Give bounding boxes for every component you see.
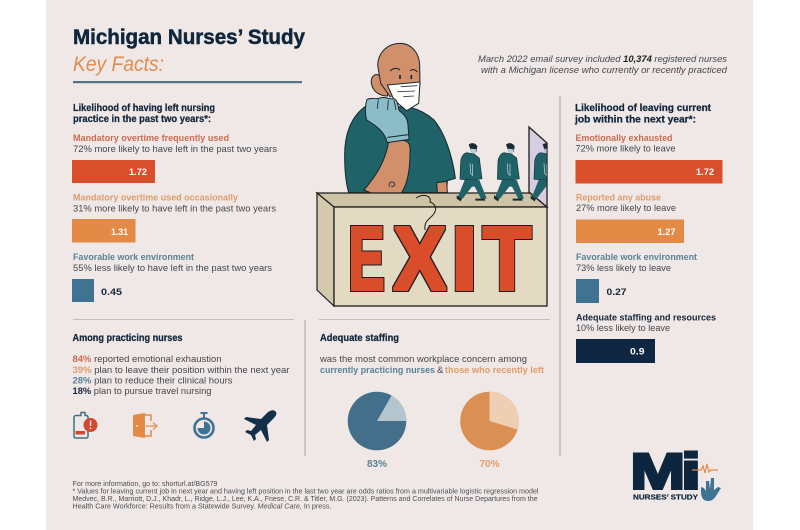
exit sign letters: T <box>483 210 531 310</box>
panel: likelihood of leaving current job: Adequate staffing and resources <box>576 312 716 324</box>
panel: adequate staffing: currently practicing nurses <box>320 365 435 376</box>
panel: likelihood of leaving current job: 0.9 <box>630 346 644 358</box>
icon: low battery <box>74 412 98 438</box>
panel: adequate staffing: Adequate staffing <box>320 333 399 344</box>
logo: Mi Nurses' Study: NURSES’ STUDY <box>633 492 698 502</box>
panel: likelihood of having left nursing: Mandatory overtime used occasionally <box>73 192 239 204</box>
footnote: * Values for leaving current job in next year and having left position in the last two year are odds ratios from a multivariable logistic regression model <box>72 488 539 496</box>
panel: likelihood of having left nursing: 1.31 <box>111 227 129 238</box>
exit sign letters: I <box>451 210 478 310</box>
panel: likelihood of leaving current job: 1.72 <box>696 167 714 178</box>
exit box top <box>317 193 547 207</box>
panel: adequate staffing: those who recently left <box>445 365 545 376</box>
title <box>73 26 305 83</box>
doorway <box>529 127 547 207</box>
title: Key Facts: <box>73 53 164 76</box>
panel: among practicing nurses: 18% plan to pursue travel nursing <box>72 386 212 397</box>
exit sign letters: E <box>349 210 384 310</box>
logo: Mi Nurses' Study <box>630 444 721 502</box>
footnote <box>72 481 539 510</box>
panel: among practicing nurses: Among practicing nurses <box>72 333 183 344</box>
hanging wire <box>416 195 436 230</box>
title: Michigan Nurses’ Study <box>73 26 305 49</box>
icon: exit door <box>133 413 157 438</box>
panel: likelihood of having left nursing: 0.45 <box>101 287 123 298</box>
panel: likelihood of having left nursing: 31% more likely to have left in the past two years <box>73 204 276 214</box>
panel: likelihood of leaving current job: Emotionally exhausted <box>576 133 673 144</box>
pie chart: 83%: 83% <box>367 459 387 470</box>
panel: likelihood of leaving current job: Favorable work environment <box>576 252 698 263</box>
walking nurses <box>457 143 561 201</box>
survey note <box>478 54 728 75</box>
panel: among practicing nurses <box>72 333 290 442</box>
panel: likelihood of leaving current job: 27% more likely to leave <box>576 203 676 214</box>
panel: likelihood of leaving current job: Reported any abuse <box>576 192 661 204</box>
panel: likelihood of leaving current job: 10% less likely to leave <box>576 323 670 334</box>
panel: among practicing nurses: 39% plan to leave their position within the next year <box>72 365 290 376</box>
pie chart: 70%: 70% <box>479 459 500 470</box>
panel: likelihood of leaving current job: 0.27 <box>606 287 626 298</box>
logo: Mi Nurses' Study: i <box>680 444 702 500</box>
icon: airplane <box>244 410 276 442</box>
footnote: Medvec, B.R., Marriott, D.J., Khadr, L., Ridge, L.J., Lee, K.A., Friese, C.R. & Titler, M.G. (2023). Patterns and Correlates of Nurse Departures from the <box>72 496 538 503</box>
exit box side <box>317 193 334 306</box>
panel: likelihood of leaving current job: Likelihood of leaving current <box>575 103 712 114</box>
panel: likelihood of having left nursing: 1.72 <box>129 167 147 178</box>
panel: likelihood of having left nursing: Favorable work environment <box>73 252 195 263</box>
panel: likelihood of having left nursing: practice in the past two years*: <box>73 114 211 125</box>
survey note: with a Michigan license who currently or recently practiced <box>481 65 728 75</box>
exit sign letters: X <box>394 210 446 310</box>
panel: likelihood of leaving current job <box>574 103 722 363</box>
survey note: March 2022 email survey included 10,374 registered nurses <box>478 54 727 64</box>
footnote: Health Care Workforce: Results from a Statewide Survey. Medical Care, In press. <box>72 504 332 510</box>
icon: stopwatch <box>194 412 214 438</box>
exit box front <box>334 207 547 306</box>
panel: adequate staffing: was the most common workplace concern among <box>319 354 527 365</box>
panel: adequate staffing: & <box>437 365 444 376</box>
panel: adequate staffing <box>319 333 545 470</box>
panel: likelihood of having left nursing: Mandatory overtime frequently used <box>73 133 229 144</box>
panel: among practicing nurses: 28% plan to reduce their clinical hours <box>72 376 233 386</box>
panel: likelihood of having left nursing: 55% less likely to have left in the past two years <box>73 263 272 274</box>
pie chart: 83% <box>348 392 406 470</box>
logo: Mi Nurses' Study: M <box>630 444 686 500</box>
footnote: For more information, go to: shorturl.at/BG579 <box>72 481 218 488</box>
panel: likelihood of leaving current job: 1.27 <box>658 227 676 238</box>
panel: likelihood of leaving current job: 73% less likely to leave <box>576 263 671 274</box>
pie chart: 70% <box>460 392 519 470</box>
panel: likelihood of leaving current job: 72% more likely to leave <box>576 144 676 154</box>
panel: likelihood of having left nursing: Likelihood of having left nursing <box>73 103 215 114</box>
panel: likelihood of having left nursing <box>72 103 277 302</box>
nurse figure <box>345 43 455 196</box>
panel: likelihood of leaving current job: job within the next year*: <box>574 114 696 126</box>
panel: among practicing nurses: 84% reported emotional exhaustion <box>72 354 222 365</box>
panel: likelihood of having left nursing: 72% more likely to have left in the past two years <box>73 144 277 155</box>
illustration: nurse behind exit sign <box>317 43 561 310</box>
